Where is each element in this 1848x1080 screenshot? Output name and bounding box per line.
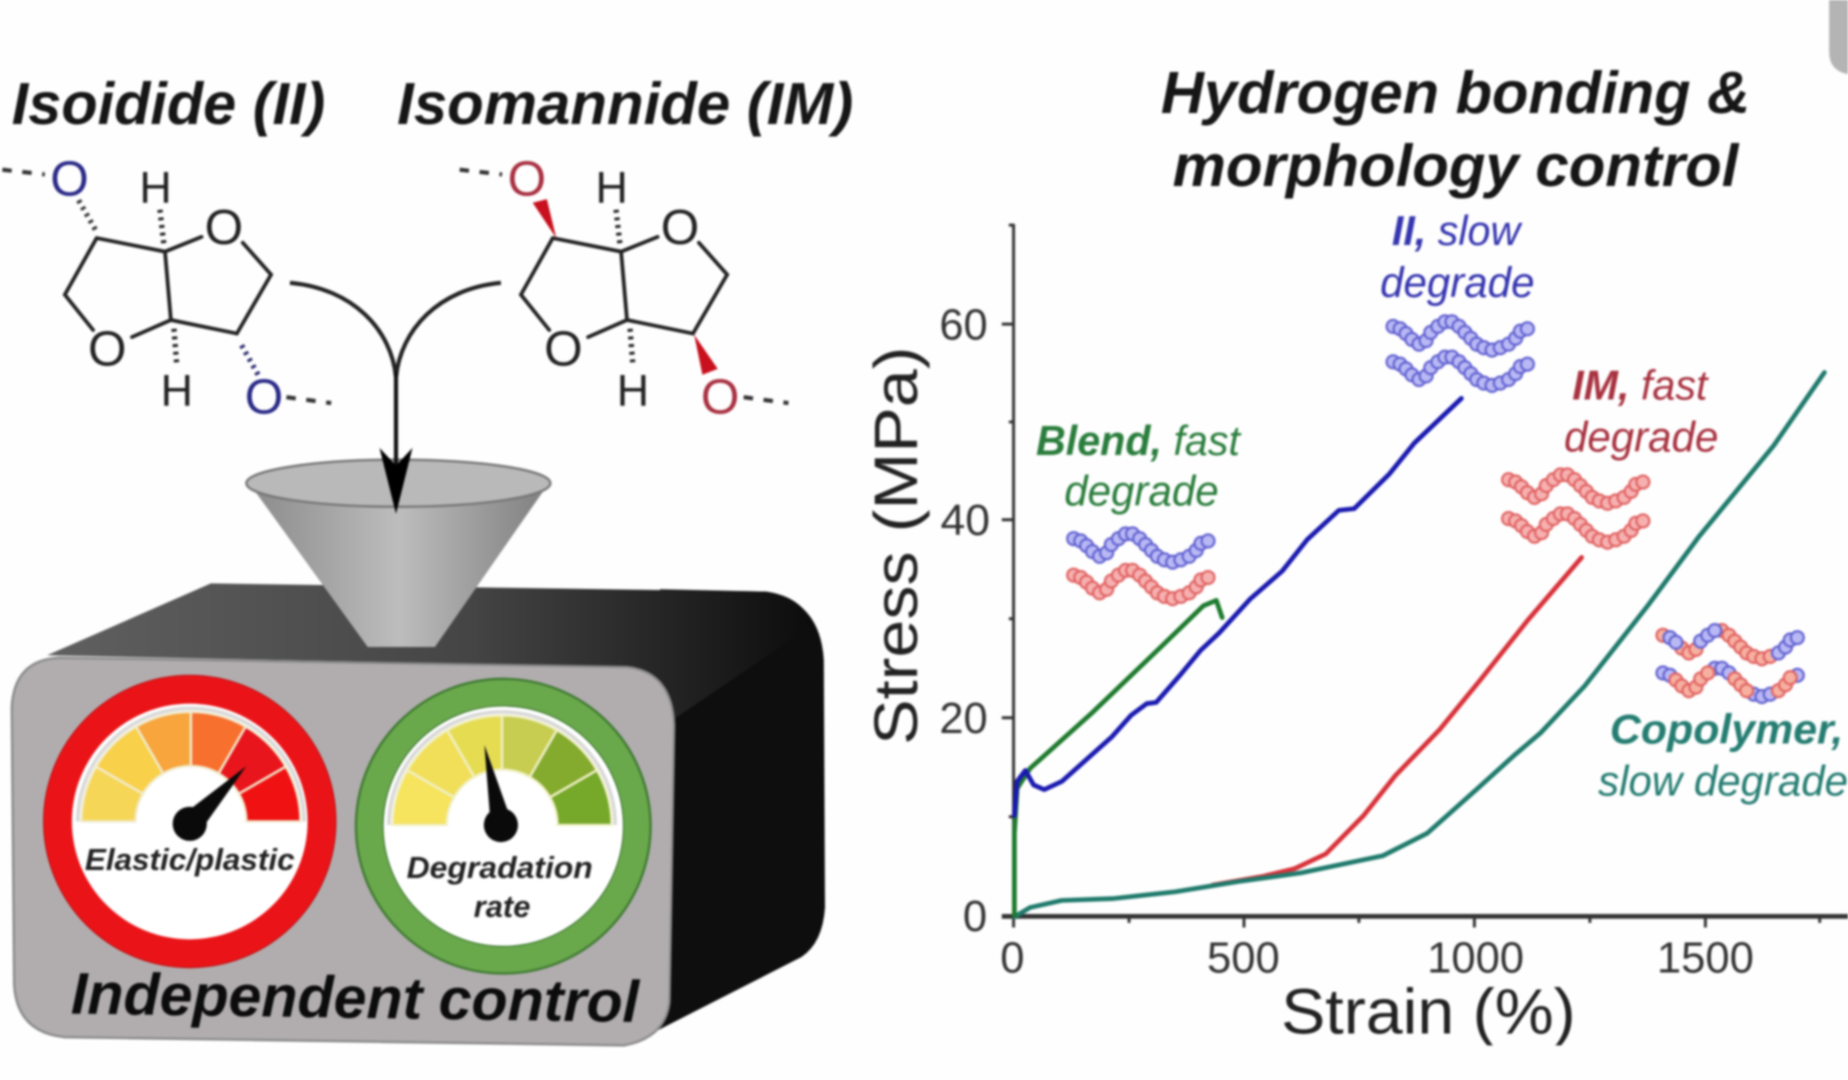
gauge: elastic/plastic: Elastic/plastic: [85, 843, 295, 877]
box front face: [12, 658, 674, 1045]
curve: blend green: [1014, 600, 1222, 916]
x tick labels: 1500: [1657, 934, 1754, 982]
axes: [1002, 224, 1848, 928]
molecule: isomannide: O: [701, 370, 739, 425]
molecule: isomannide: O: [544, 321, 583, 376]
label: copolymer slow degrade: Copolymer,: [1610, 707, 1843, 753]
label: blend fast degrade: Blend, fast: [1036, 418, 1241, 464]
y tick labels: 0: [963, 893, 987, 941]
molecule: isomannide: O: [661, 200, 699, 255]
polymer chains: blend: [1067, 527, 1215, 605]
box right side: [628, 589, 825, 1045]
x tick labels: 1000: [1427, 934, 1524, 982]
curve: copolymer teal: [1014, 372, 1824, 917]
gauge: degradation rate: Degradation: [407, 851, 593, 885]
molecule: isoidide: H: [139, 163, 172, 213]
curve: II blue: [1014, 398, 1461, 816]
label: copolymer slow degrade: slow degrade: [1598, 758, 1848, 805]
polymer chains: copolymer: [1656, 624, 1804, 703]
y tick labels: [939, 301, 990, 941]
gauge: degradation rate: [356, 679, 651, 974]
molecule: isomannide: H: [596, 163, 628, 213]
gauge: degradation rate: rate: [474, 890, 530, 924]
axis title: strain: Strain (%): [1281, 977, 1576, 1048]
molecule: isoidide: O: [205, 200, 243, 255]
grey corner tab: [1829, 0, 1848, 74]
molecule: isoidide: O: [50, 152, 89, 207]
molecule: isoidide: H: [161, 365, 193, 415]
box top face: [47, 583, 813, 719]
heading: Isomannide (IM): Isomannide (IM): [397, 72, 853, 137]
molecule: isoidide: O: [245, 370, 283, 425]
curve: IM red: [1213, 557, 1582, 885]
label: IM fast degrade: IM, fast: [1572, 363, 1709, 409]
label: II slow degrade: II, slow: [1392, 208, 1522, 254]
molecule: isoidide: [2, 152, 331, 425]
gauge: elastic/plastic: [44, 675, 336, 968]
y tick labels: 40: [940, 497, 990, 545]
polymer chains: IM: [1502, 468, 1649, 549]
label: blend fast degrade: [1036, 418, 1241, 515]
axis title: stress: Stress (MPa): [862, 347, 930, 745]
y tick labels: 20: [939, 695, 988, 743]
molecule: isomannide: [460, 152, 788, 425]
funnel: [246, 460, 550, 647]
heading: Isoidide (II): Isoidide (II): [12, 72, 325, 137]
molecule: isomannide: H: [617, 365, 649, 415]
label: II slow degrade: degrade: [1380, 259, 1534, 306]
machine box: [12, 583, 825, 1045]
label: independent control: Independent control: [71, 962, 641, 1035]
polymer chains: II: [1387, 315, 1534, 392]
chart heading: Hydrogen bonding &: [1161, 61, 1750, 126]
molecule: isomannide: O: [508, 152, 546, 207]
chart heading: morphology control: [1173, 134, 1740, 199]
y tick labels: 60: [939, 301, 988, 349]
label: copolymer slow degrade: [1598, 707, 1848, 805]
x tick labels: [1000, 934, 1754, 982]
label: II slow degrade: [1380, 208, 1534, 306]
merge arrow: [290, 283, 501, 514]
label: blend fast degrade: degrade: [1064, 468, 1219, 515]
x tick labels: 0: [1000, 934, 1025, 982]
label: IM fast degrade: degrade: [1564, 413, 1718, 460]
x tick labels: 500: [1207, 934, 1280, 982]
stress-strain chart: [862, 208, 1848, 1069]
label: IM fast degrade: [1564, 363, 1718, 460]
molecule: isoidide: O: [88, 321, 127, 376]
chart heading: [1161, 61, 1750, 199]
